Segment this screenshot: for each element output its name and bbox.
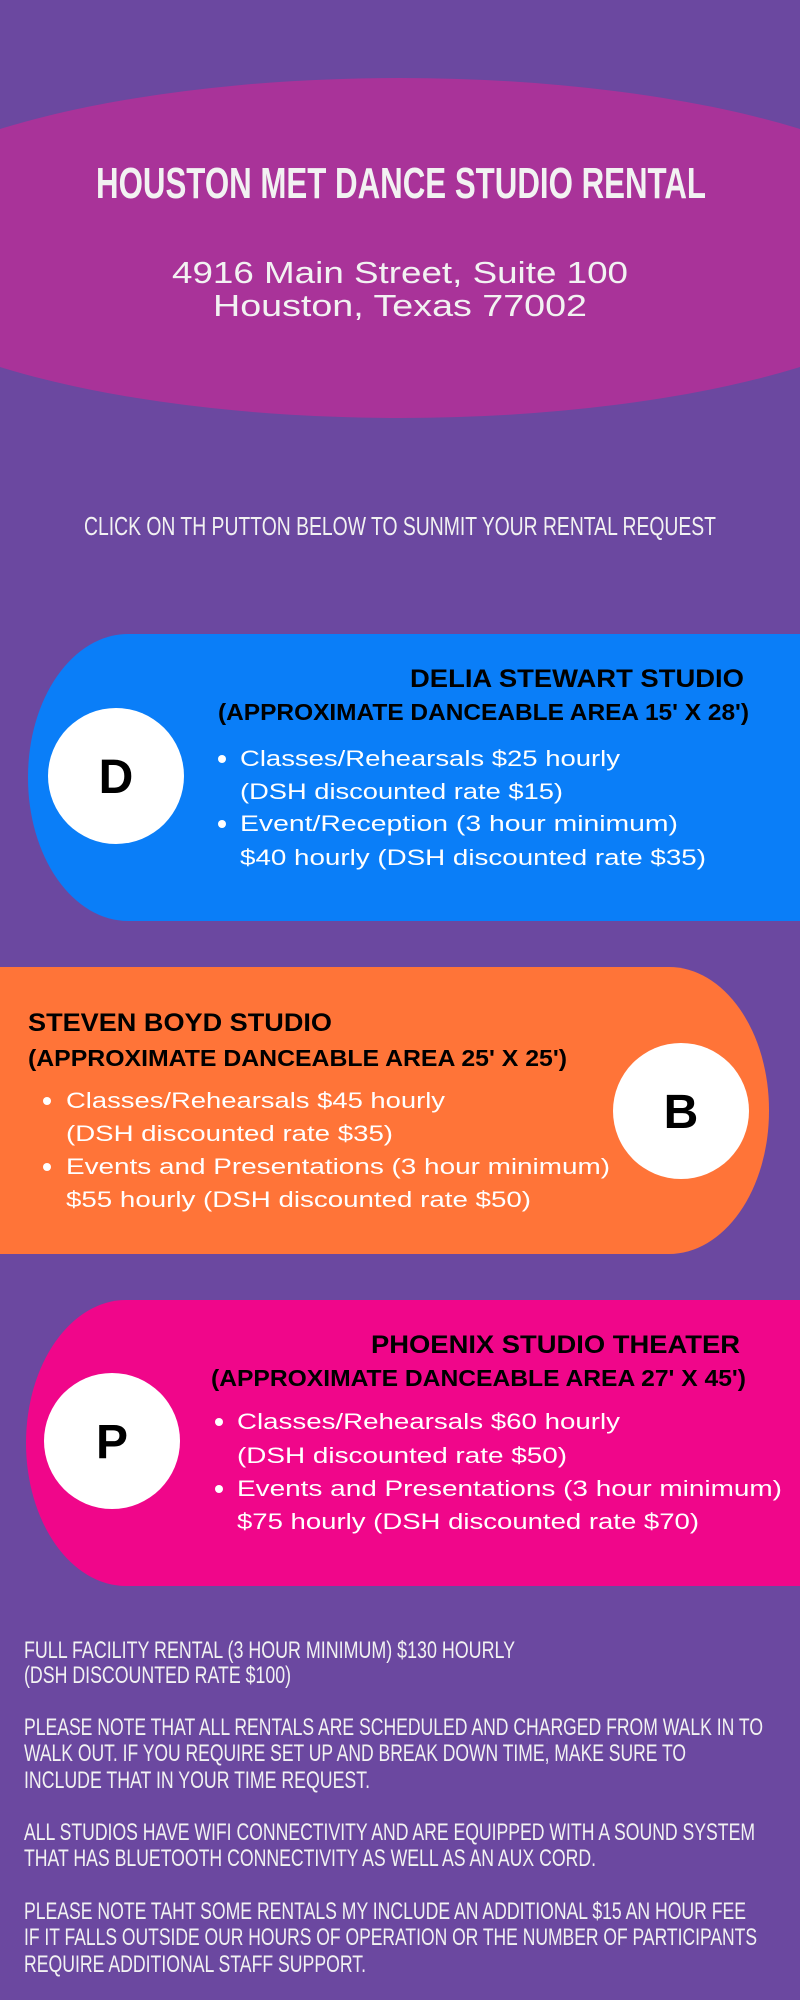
rates list: Event/Reception (3 hour minimum) xyxy=(240,811,678,836)
icon: B circle: B xyxy=(664,1086,698,1139)
rates list: Events and Presentations (3 hour minimum) xyxy=(66,1154,610,1179)
address: 4916 Main Street, Suite 100 xyxy=(172,255,628,290)
rates list: $75 hourly (DSH discounted rate $70) xyxy=(237,1509,699,1534)
rates list: $40 hourly (DSH discounted rate $35) xyxy=(240,845,706,870)
icon: P circle: P xyxy=(96,1416,128,1469)
rates list: Events and Presentations (3 hour minimum) xyxy=(237,1476,782,1501)
heading: (APPROXIMATE DANCEABLE AREA 27' X 45') xyxy=(211,1365,746,1391)
rates list: Classes/Rehearsals $60 hourly xyxy=(237,1409,620,1434)
rates list: Classes/Rehearsals $25 hourly xyxy=(240,746,620,771)
icon: B circle xyxy=(613,1043,749,1179)
rates list: (DSH discounted rate $35) xyxy=(66,1121,393,1146)
heading xyxy=(218,665,749,725)
panel: Steven Boyd Studio xyxy=(0,967,769,1254)
text block: notes: THAT HAS BLUETOOTH CONNECTIVITY AS WELL AS AN AUX CORD. xyxy=(24,1845,596,1872)
text block: notes: FULL FACILITY RENTAL (3 HOUR MINIMUM) $130 HOURLY xyxy=(24,1637,515,1664)
address: Houston, Texas 77002 xyxy=(213,288,587,323)
header ellipse xyxy=(0,78,800,418)
text block: notes xyxy=(24,1637,763,1978)
rates list xyxy=(215,1409,782,1534)
rates list: (DSH discounted rate $15) xyxy=(240,779,563,804)
panel: Delia Stewart Studio xyxy=(28,634,800,921)
heading xyxy=(211,1331,746,1391)
text block: notes: (DSH DISCOUNTED RATE $100) xyxy=(24,1662,291,1689)
rates list xyxy=(218,746,706,870)
heading: DELIA STEWART STUDIO xyxy=(410,665,744,693)
rates list: Classes/Rehearsals $45 hourly xyxy=(66,1088,445,1113)
heading xyxy=(28,1009,567,1071)
icon: D circle xyxy=(48,708,184,844)
text block: notes: INCLUDE THAT IN YOUR TIME REQUEST. xyxy=(24,1767,370,1794)
text block: notes: REQUIRE ADDITIONAL STAFF SUPPORT. xyxy=(24,1951,366,1978)
rates list xyxy=(43,1088,610,1212)
icon: P circle xyxy=(44,1373,180,1509)
icon: D circle: D xyxy=(99,751,133,804)
heading: (APPROXIMATE DANCEABLE AREA 15' X 28') xyxy=(218,699,749,725)
heading: (APPROXIMATE DANCEABLE AREA 25' X 25') xyxy=(28,1045,567,1071)
address xyxy=(172,255,628,323)
rates list: (DSH discounted rate $50) xyxy=(237,1443,567,1468)
heading: STEVEN BOYD STUDIO xyxy=(28,1009,332,1037)
heading: PHOENIX STUDIO THEATER xyxy=(371,1331,740,1359)
panel: Phoenix Studio Theater xyxy=(26,1300,800,1586)
rates list: $55 hourly (DSH discounted rate $50) xyxy=(66,1187,531,1212)
